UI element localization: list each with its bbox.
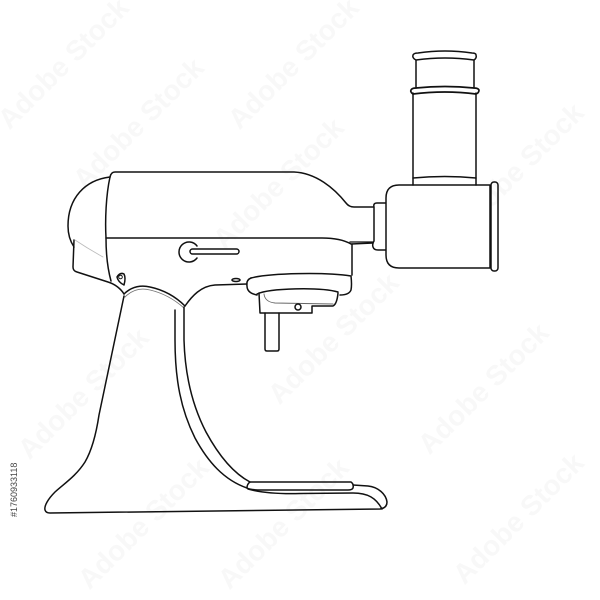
tube collar ring (411, 86, 479, 94)
food pusher (413, 51, 476, 88)
mixer stand (45, 296, 387, 513)
grater housing (386, 185, 490, 268)
mixer head (106, 172, 373, 281)
speed lever (179, 242, 239, 262)
stand mixer drawing (45, 51, 498, 513)
feed tube (413, 93, 476, 185)
watermarks: Adobe Stock (207, 112, 350, 255)
rear dome cap (68, 177, 124, 294)
beater shaft (265, 313, 279, 351)
watermarks: Adobe Stock (447, 97, 590, 240)
base groove (248, 489, 382, 509)
watermarks: Adobe Stock (212, 452, 355, 595)
attachment neck (350, 241, 373, 243)
watermarks: Adobe Stock (72, 452, 215, 595)
watermarks: Adobe Stock (67, 52, 210, 195)
neck joint (124, 284, 247, 308)
stock image id: #1760933118 (9, 463, 19, 517)
stand neck groove (175, 307, 250, 488)
drum flange (491, 182, 498, 271)
watermarks: Adobe Stock (412, 317, 555, 460)
attachment collar (373, 203, 388, 250)
bowl plate (247, 482, 353, 490)
planetary hub (247, 274, 352, 313)
watermarks: Adobe Stock (12, 322, 155, 465)
watermarks: Adobe Stock (262, 267, 405, 410)
small vent (232, 278, 240, 282)
lock icon (117, 273, 125, 285)
watermarks: Adobe Stock (447, 447, 590, 590)
